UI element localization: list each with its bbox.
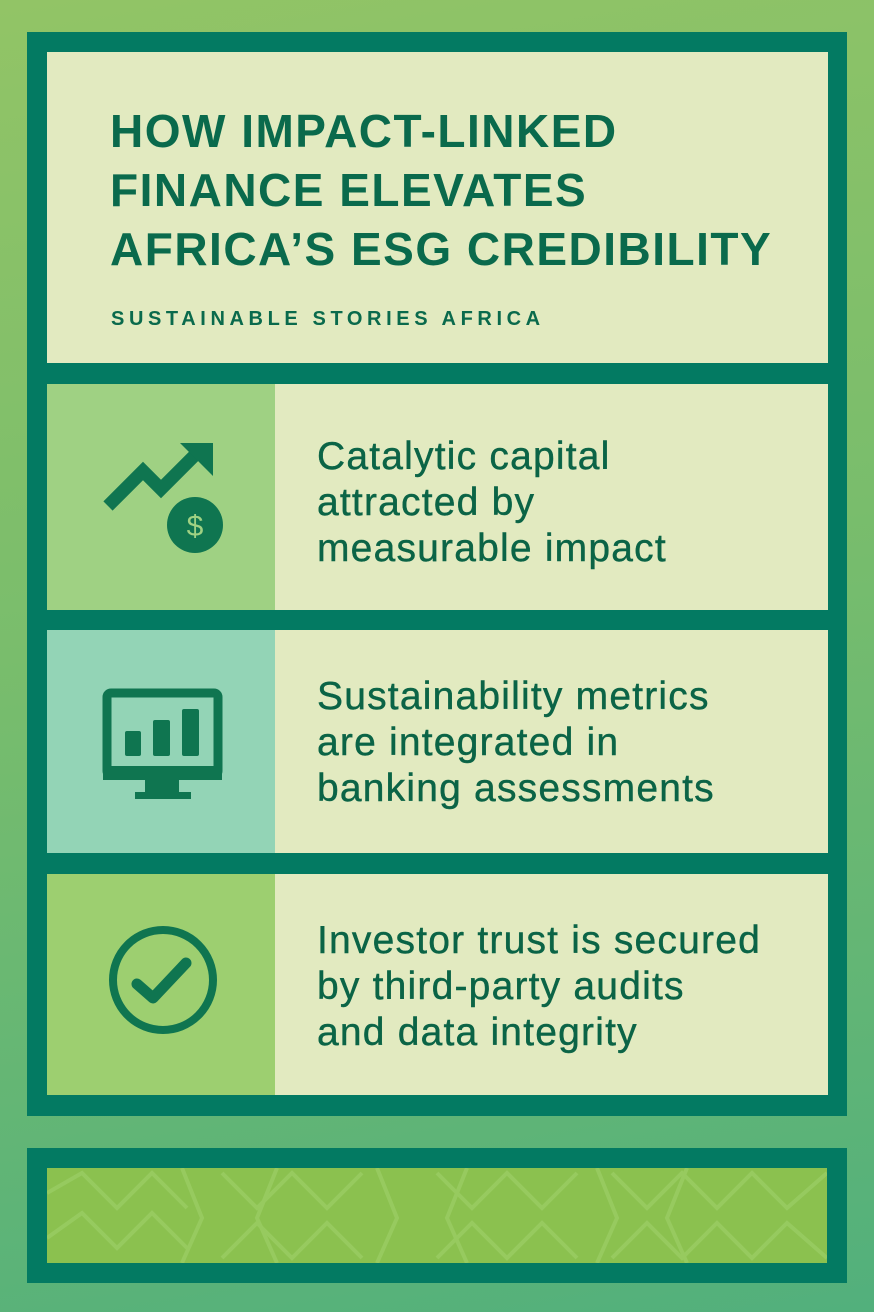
text: catalytic capital: attracted by — [317, 481, 535, 524]
text: sustainability metrics: Sustainability metrics — [317, 675, 710, 718]
text: investor trust: by third-party audits — [317, 965, 685, 1008]
row 3 — [47, 874, 828, 1095]
text: investor trust: Investor trust is secured — [317, 919, 761, 962]
text: investor trust: and data integrity — [317, 1011, 638, 1054]
text: sustainability metrics: banking assessments — [317, 767, 715, 810]
text: investor trust — [317, 919, 761, 1054]
icon panel: growth — [47, 384, 275, 610]
title — [110, 105, 772, 275]
patterned strip — [47, 1168, 827, 1263]
text: catalytic capital — [317, 435, 667, 570]
subtitle: SUSTAINABLE STORIES AFRICA — [111, 308, 545, 330]
icon panel: check — [47, 874, 275, 1095]
main frame — [27, 32, 847, 1116]
title: HOW IMPACT-LINKED — [110, 105, 618, 157]
icon: chart arrow with dollar: $ — [187, 510, 204, 543]
bottom band — [27, 1148, 847, 1283]
row 2 — [47, 630, 828, 853]
title panel — [47, 52, 828, 363]
icon: chart arrow with dollar — [104, 443, 223, 553]
icon: monitor bar chart — [102, 688, 222, 799]
title: FINANCE ELEVATES — [110, 164, 587, 216]
icon: check circle — [109, 926, 217, 1034]
text: catalytic capital: measurable impact — [317, 527, 667, 570]
text: sustainability metrics — [317, 675, 715, 810]
row 1 — [47, 384, 828, 610]
text: sustainability metrics: are integrated in — [317, 721, 619, 764]
text: catalytic capital: Catalytic capital — [317, 435, 611, 478]
icon panel: monitor — [47, 630, 275, 853]
title: AFRICA’S ESG CREDIBILITY — [110, 223, 772, 275]
